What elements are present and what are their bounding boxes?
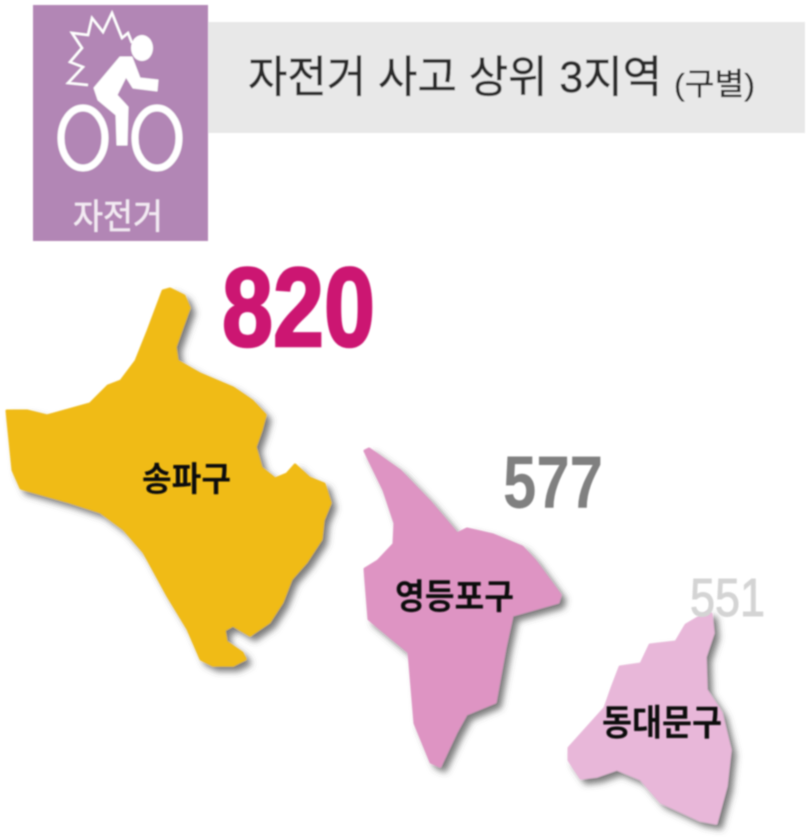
map: Dongdaemun-gu [569, 612, 730, 823]
title suffix: (구별) [674, 67, 755, 102]
label: Songpa-gu: 송파구 [142, 461, 231, 499]
label: Dongdaemun-gu: 동대문구 [602, 702, 722, 743]
icon panel: bicycle accident [33, 5, 208, 241]
icon label: 자전거 [73, 198, 163, 237]
title text: 자전거 사고 상위 3지역 [248, 53, 662, 102]
value: 820: 820 [222, 245, 375, 370]
label: Yeongdeungpo-gu: 영등포구 [395, 578, 514, 617]
value: 577: 577 [503, 441, 603, 524]
value: 551: 551 [690, 568, 765, 628]
map: Yeongdeungpo-gu [365, 449, 560, 766]
icon: rider head [131, 35, 153, 61]
icon: rider body [94, 57, 158, 145]
icon: impact burst [68, 13, 132, 85]
icon: right wheel [135, 108, 179, 168]
icon: left wheel [61, 108, 105, 168]
title banner [208, 22, 805, 133]
map: Songpa-gu [7, 289, 330, 665]
